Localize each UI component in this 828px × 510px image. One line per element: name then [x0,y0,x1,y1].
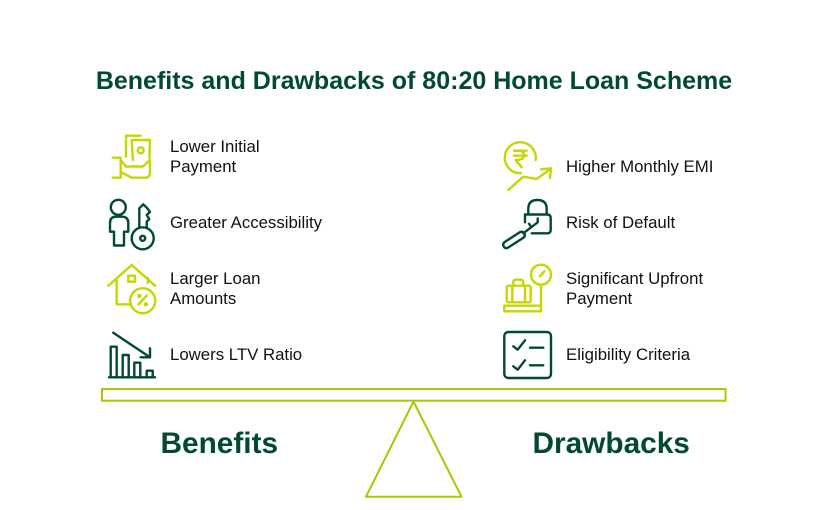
text: lowers ltv ratio: Lowers LTV Ratio [170,345,302,364]
heading: drawbacks: Drawbacks [532,427,690,460]
text: significant upfront payment: Payment [566,289,633,308]
text: higher monthly emi: Higher Monthly EMI [566,157,713,176]
icon: person with key [110,200,154,249]
icon: falling bar chart [109,333,155,377]
text: risk of default: Risk of Default [566,213,675,232]
icon: checklist [504,332,551,378]
seesaw fulcrum [366,402,462,497]
text: larger loan amounts: Amounts [170,289,236,308]
icon: luggage on scale [504,265,551,311]
heading: benefits: Benefits [160,427,278,460]
icon: hand holding money [113,136,150,178]
seesaw beam [102,389,726,401]
text: larger loan amounts: Larger Loan [170,269,261,288]
text: significant upfront payment: Significant Upfront [566,269,703,288]
icon: rupee with rising arrow [505,142,551,190]
icon: house with percent [108,265,155,313]
text: greater accessibility: Greater Accessibility [170,213,323,232]
text: lower initial payment: Payment [170,157,237,176]
icon: lock with key [503,200,551,248]
text: lower initial payment: Lower Initial [170,137,260,156]
text: eligibility criteria: Eligibility Criteria [566,345,691,364]
title: Benefits and Drawbacks of 80:20 Home Loan Scheme [96,67,732,95]
